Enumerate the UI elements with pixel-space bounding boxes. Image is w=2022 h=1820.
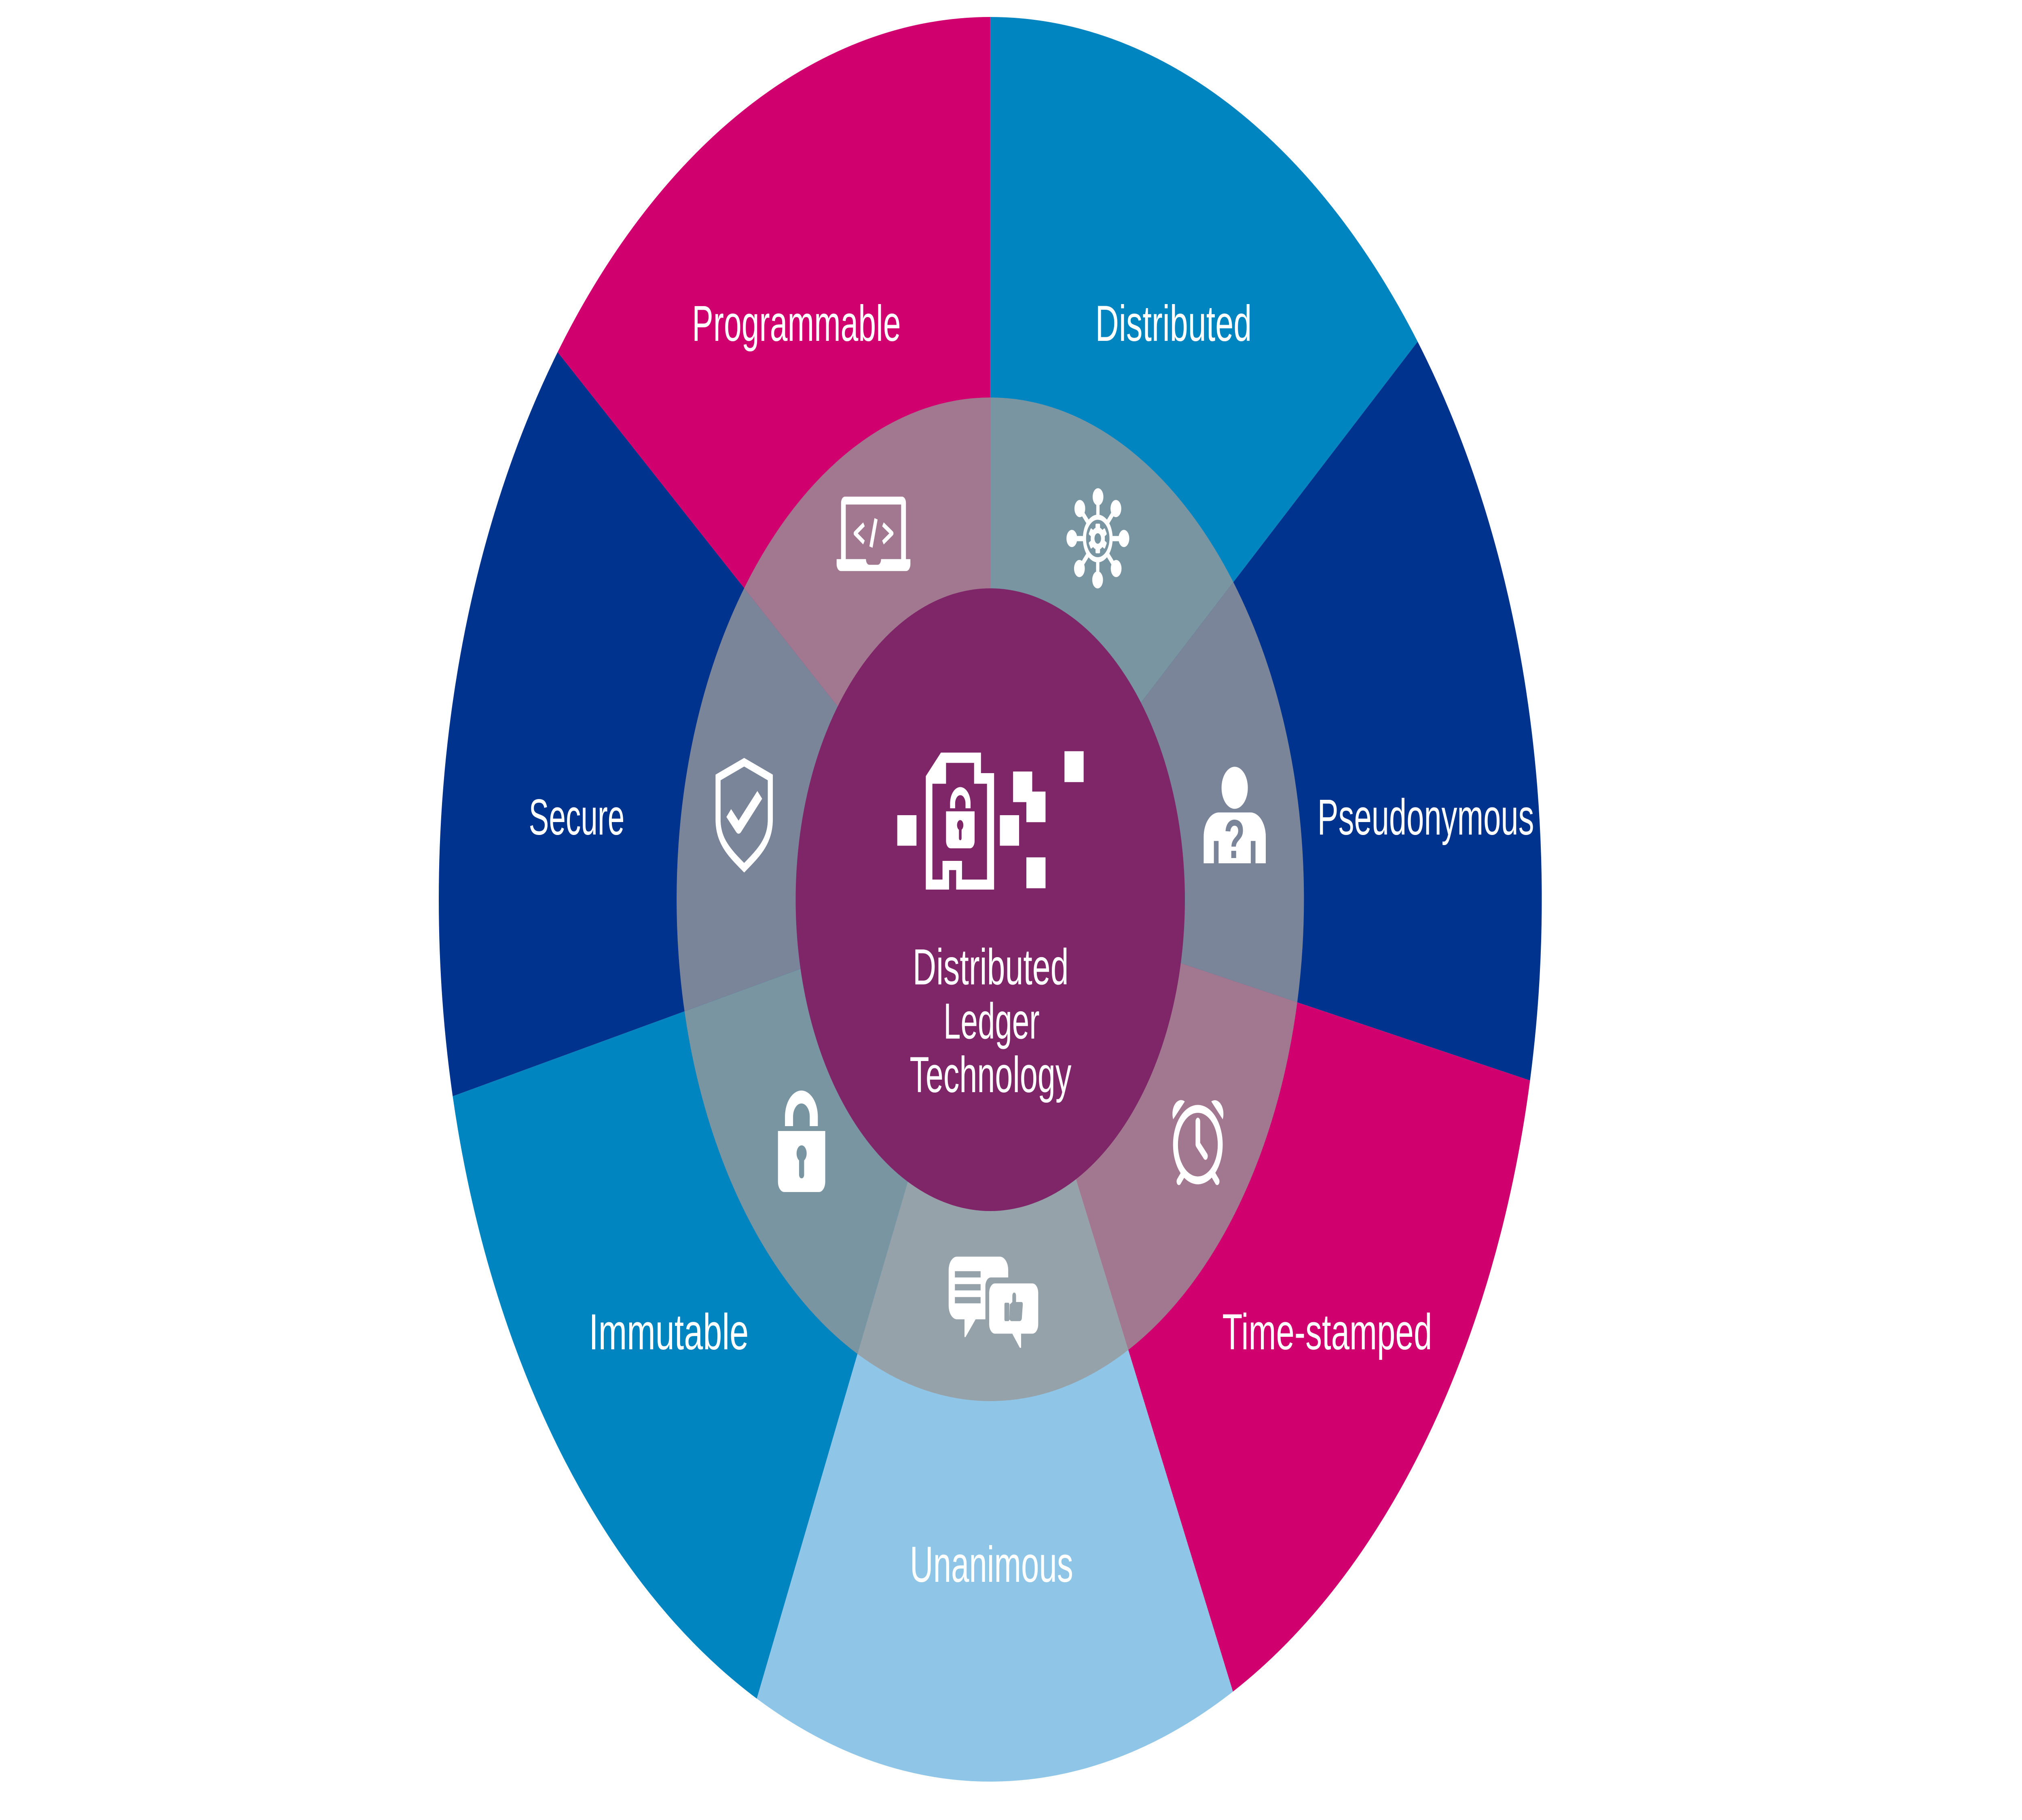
icon: alarm clock bbox=[1172, 1100, 1223, 1182]
inner ring segment: Secure bbox=[677, 588, 990, 1011]
outer segment: Time-stamped bbox=[990, 899, 1530, 1692]
hub title bbox=[909, 939, 1071, 1103]
inner ring segment: Pseudonymous bbox=[990, 582, 1304, 1002]
outer segment: Programmable bbox=[558, 17, 990, 899]
label: Unanimous: Unanimous bbox=[910, 1537, 1073, 1593]
outer segment: Distributed bbox=[990, 17, 1418, 899]
label: Time-stamped: Time-stamped bbox=[1222, 1304, 1432, 1361]
outer segment: Secure bbox=[439, 352, 990, 1096]
outer segment: Unanimous bbox=[757, 899, 1233, 1782]
panel: Secure bbox=[439, 352, 990, 1096]
icon: ledger document with padlock and data squares bbox=[897, 751, 1084, 890]
icon: network with gear bbox=[1066, 488, 1129, 588]
inner ring segment: Programmable bbox=[744, 397, 990, 899]
icon: shield with check mark bbox=[718, 762, 770, 868]
label: Distributed: Distributed bbox=[1095, 296, 1252, 352]
outer segment: Immutable bbox=[453, 899, 990, 1699]
panel: Programmable bbox=[558, 17, 990, 899]
panel: Unanimous bbox=[757, 899, 1233, 1782]
panel: Time-stamped bbox=[990, 899, 1530, 1692]
inner ring segment: Immutable bbox=[685, 899, 990, 1354]
inner ring segment: Time-stamped bbox=[990, 899, 1297, 1350]
label: Programmable: Programmable bbox=[692, 296, 901, 352]
inner ring segment: Unanimous bbox=[857, 899, 1128, 1401]
label: Pseudonymous: Pseudonymous bbox=[1318, 789, 1534, 846]
icon: anonymous person bbox=[1203, 767, 1266, 870]
hub title: Technology bbox=[909, 1047, 1071, 1103]
icon: padlock bbox=[778, 1097, 825, 1192]
panel: Pseudonymous bbox=[990, 342, 1542, 1080]
panel: Immutable bbox=[453, 899, 990, 1699]
label: Secure: Secure bbox=[529, 789, 624, 846]
hub circle bbox=[796, 588, 1185, 1211]
icon: laptop with code bbox=[837, 497, 910, 571]
hub title: Distributed bbox=[913, 939, 1068, 996]
icon: speech bubbles with thumbs up bbox=[949, 1257, 1038, 1348]
label: Immutable: Immutable bbox=[589, 1304, 749, 1361]
inner ring segment: Distributed bbox=[990, 397, 1233, 899]
icon: anonymous person: ? bbox=[1224, 809, 1245, 870]
panel: centre hub bbox=[796, 588, 1185, 1211]
outer segment: Pseudonymous bbox=[990, 342, 1542, 1080]
hub title: Ledger bbox=[943, 993, 1040, 1050]
panel: Distributed bbox=[990, 17, 1418, 899]
